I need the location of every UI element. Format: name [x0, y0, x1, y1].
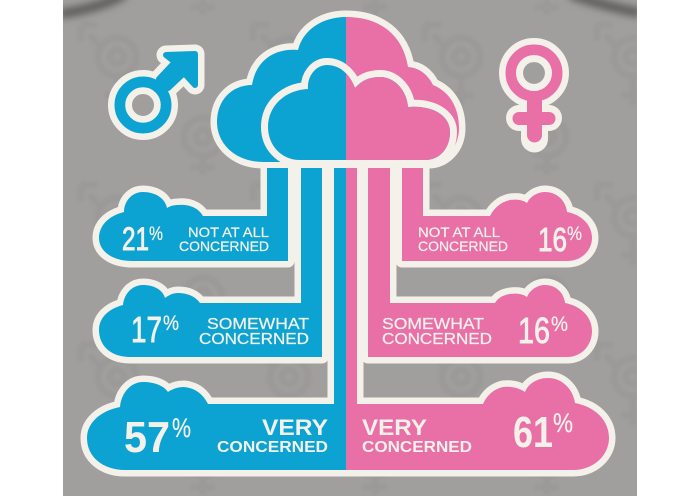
label: not at all concerned: NOT AT ALL: [188, 224, 269, 240]
stat: 21%: 21: [122, 221, 149, 257]
stat: 16%: %: [551, 313, 568, 336]
stat: 16%: 16: [518, 310, 550, 351]
stat: 21%: %: [149, 224, 163, 245]
label: somewhat concerned: SOMEWHAT: [382, 316, 484, 333]
stat: 17%: 17: [131, 309, 162, 350]
label: somewhat concerned: CONCERNED: [199, 331, 309, 348]
label: very concerned: VERY: [262, 415, 328, 440]
label: not at all concerned: [179, 224, 269, 254]
icon: female symbol: [511, 50, 557, 139]
label: somewhat concerned: [199, 316, 309, 348]
stat: 16%: 16: [538, 221, 567, 258]
label: somewhat concerned: [382, 316, 492, 348]
label: not at all concerned: CONCERNED: [418, 238, 508, 254]
large cloud: female half: [346, 17, 459, 162]
front cloud: [268, 65, 450, 160]
label: very concerned: VERY: [362, 415, 427, 440]
label: not at all concerned: NOT AT ALL: [418, 224, 500, 240]
label: very concerned: CONCERNED: [362, 439, 472, 456]
stat: 17%: %: [163, 312, 179, 335]
stat: 16%: %: [567, 224, 582, 245]
large cloud: male half: [217, 17, 346, 162]
panel: male not at all concerned: [99, 168, 288, 261]
cloud outlines: [87, 17, 609, 470]
icon: male symbol: [120, 54, 195, 128]
stat: 61%: %: [553, 408, 573, 438]
panel: female somewhat concerned: [368, 168, 592, 357]
label: somewhat concerned: CONCERNED: [382, 331, 492, 348]
label: not at all concerned: [418, 224, 508, 254]
panel: female very concerned: [346, 168, 609, 470]
label: not at all concerned: CONCERNED: [179, 238, 269, 254]
stat: 57%: 57: [124, 413, 170, 462]
label: very concerned: CONCERNED: [217, 439, 328, 456]
label: very concerned: [217, 415, 328, 456]
stat: 57%: %: [172, 413, 191, 443]
stat: 61%: 61: [513, 408, 553, 457]
panel: male very concerned: [87, 168, 346, 470]
label: somewhat concerned: SOMEWHAT: [207, 316, 309, 333]
panel: male somewhat concerned: [99, 168, 322, 357]
panel: female not at all concerned: [402, 168, 592, 261]
label: very concerned: [362, 415, 472, 456]
